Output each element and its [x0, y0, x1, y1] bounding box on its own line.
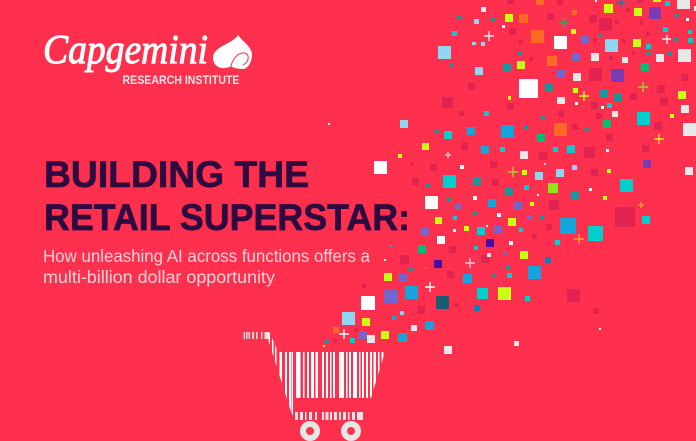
logo: Capgemini Research Institute	[43, 26, 252, 87]
subtitle: How unleashing AI across functions offers a	[43, 246, 370, 266]
title: RETAIL SUPERSTAR:	[44, 196, 410, 238]
logo subtitle: RESEARCH INSTITUTE	[122, 75, 240, 87]
title: BUILDING THE	[44, 153, 309, 195]
particle cloud of coloured squares	[323, 0, 696, 354]
cart wheels	[303, 424, 358, 438]
icon: spade	[213, 35, 252, 69]
shopping cart made of barcode stripes	[244, 332, 384, 438]
subtitle: multi-billion dollar opportunity	[43, 267, 275, 287]
cart handle	[244, 332, 270, 339]
subtitle	[43, 246, 370, 287]
logo wordmark: Capgemini	[43, 26, 208, 72]
title	[44, 153, 410, 238]
cart lower rail	[295, 412, 363, 420]
cart basket stripes	[266, 333, 384, 423]
plus-shaped sparkles	[339, 0, 671, 339]
